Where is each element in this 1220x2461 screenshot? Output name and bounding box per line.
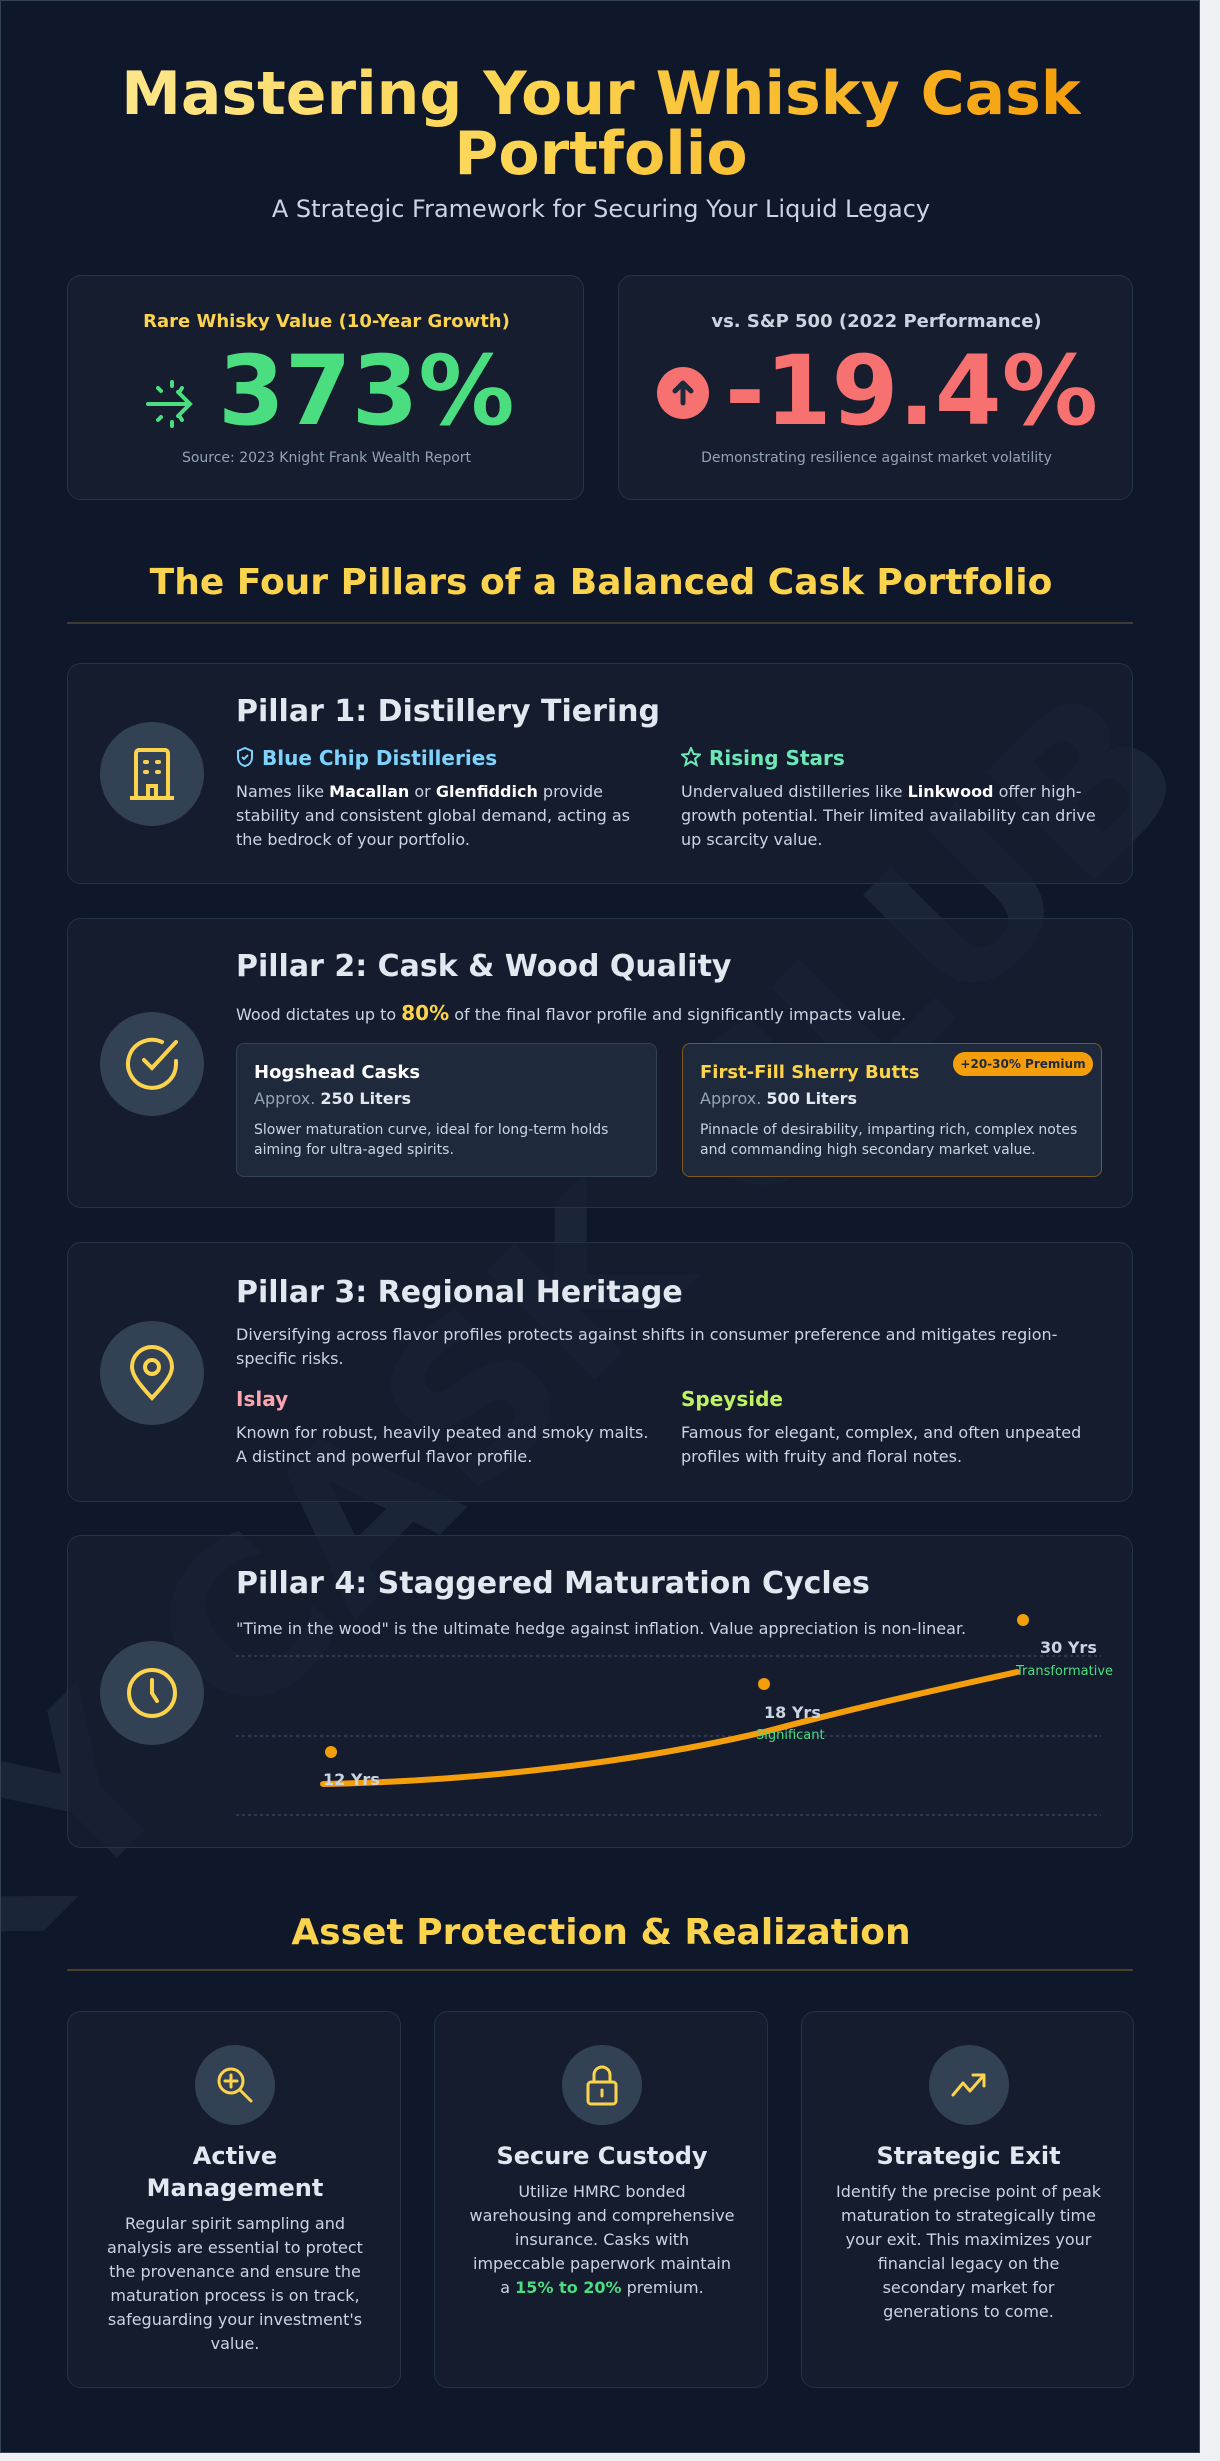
point: 30 yrs: 30 Yrs [1040, 1638, 1097, 1657]
point: 18 yrs: Significant [756, 1728, 825, 1743]
card: secure custody: Secure Custody [496, 2142, 708, 2170]
column: rising stars: Rising Stars [709, 746, 845, 770]
point: 12 yrs [323, 1746, 380, 1789]
panel: pillar 3 [67, 1242, 1133, 1502]
card: strategic exit [801, 2011, 1134, 2388]
label: Rare Whisky Value (10-Year Growth) [143, 311, 510, 332]
icon: lock [562, 2045, 642, 2125]
column: blue chip: Blue Chip Distilleries [262, 746, 497, 770]
badge [953, 1052, 1093, 1076]
icon: clock [100, 1641, 204, 1745]
intro: Diversifying across flavor profiles protects against shifts in consumer preference and mitigates region-specific risks. [236, 1325, 1057, 1368]
subcard: sherry butts: Approx. 500 Liters [700, 1089, 857, 1108]
source: Source: 2023 Knight Frank Wealth Report [182, 450, 471, 466]
card: secure custody [434, 2011, 768, 2388]
column: rising stars: Undervalued distilleries like Linkwood offer high-growth potential. Their limited availability can drive up scarcity value. [681, 782, 1096, 849]
point: 30 yrs [1015, 1614, 1113, 1679]
icon: red up arrow circle [657, 367, 709, 419]
subcard: hogshead: Slower maturation curve, ideal for long-term holds aiming for ultra-aged spirits. [254, 1122, 608, 1158]
icon: trend up [929, 2045, 1009, 2125]
subcard: sherry butts: First-Fill Sherry Butts [700, 1062, 919, 1083]
subcard: hogshead: Approx. 250 Liters [254, 1089, 411, 1108]
column: islay: Islay [236, 1387, 288, 1411]
panel: pillar 2 [67, 918, 1133, 1208]
subcard: hogshead: Hogshead Casks [254, 1062, 420, 1083]
heading: Pillar 3: Regional Heritage [236, 1275, 683, 1310]
subcard: hogshead [236, 1043, 657, 1177]
card: active management: Active [193, 2142, 277, 2170]
icon: map pin [100, 1321, 204, 1425]
section heading: asset protection: Asset Protection & Realization [291, 1912, 911, 1953]
big number: -19.4% [725, 335, 1098, 447]
badge: +20-30% Premium [960, 1057, 1086, 1071]
card: secure custody: Utilize HMRC bonded warehousing and comprehensive insurance. Casks with impeccable paperwork maintain a 15% to 20% premium. [470, 2182, 734, 2297]
section heading: four pillars: The Four Pillars of a Balanced Cask Portfolio [150, 562, 1052, 603]
caption: Demonstrating resilience against market volatility [701, 450, 1052, 466]
column: blue chip [236, 746, 630, 849]
subtitle: A Strategic Framework for Securing Your Liquid Legacy [272, 195, 930, 223]
label: vs. S&P 500 (2022 Performance) [711, 311, 1042, 332]
column: speyside: Famous for elegant, complex, and often unpeated profiles with fruity and floral notes. [681, 1423, 1081, 1466]
icon: growth arrow [146, 380, 193, 428]
heading: Pillar 2: Cask & Wood Quality [236, 949, 731, 984]
column: speyside: Speyside [681, 1387, 783, 1411]
card: active management: Regular spirit sampling and analysis are essential to protect the provenance and ensure the maturation process is on track, safeguarding your investment's value. [107, 2214, 363, 2353]
panel: pillar 1 [67, 663, 1133, 884]
stat card: rare whisky [67, 275, 584, 500]
icon: magnifier [195, 2045, 275, 2125]
card: strategic exit: Identify the precise point of peak maturation to strategically time your exit. This maximizes your financial legacy on the secondary market for generations to come. [836, 2182, 1101, 2321]
title [121, 59, 1081, 189]
panel: pillar 4 [67, 1535, 1133, 1848]
intro: "Time in the wood" is the ultimate hedge against inflation. Value appreciation is non-linear. [236, 1619, 966, 1638]
subcard: sherry butts [682, 1043, 1102, 1177]
big number: 373% [218, 335, 515, 447]
card: active management [67, 2011, 401, 2388]
stat card: S&P [618, 275, 1133, 500]
title: Mastering Your Whisky Cask [121, 59, 1081, 129]
point: 18 yrs: 18 Yrs [764, 1703, 821, 1722]
chart: maturation curve [236, 1614, 1113, 1816]
column: islay: Known for robust, heavily peated and smoky malts. A distinct and powerful flavor profile. [236, 1423, 648, 1466]
column: islay [236, 1387, 648, 1466]
intro: Wood dictates up to 80% of the final flavor profile and significantly impacts value. [236, 1001, 906, 1025]
point: 30 yrs: Transformative [1015, 1664, 1113, 1679]
icon: building [100, 722, 204, 826]
title: Portfolio [454, 119, 748, 189]
column: speyside [681, 1387, 1081, 1466]
point: 12 yrs: 12 Yrs [323, 1770, 380, 1789]
subcard: sherry butts: Pinnacle of desirability, imparting rich, complex notes and commanding high secondary market value. [700, 1122, 1077, 1158]
card: strategic exit: Strategic Exit [876, 2142, 1061, 2170]
heading: Pillar 1: Distillery Tiering [236, 694, 660, 729]
column: rising stars [681, 746, 1096, 849]
icon: check circle [100, 1012, 204, 1116]
point: 18 yrs [756, 1678, 825, 1743]
card: active management: Management [147, 2174, 323, 2202]
heading: Pillar 4: Staggered Maturation Cycles [236, 1566, 870, 1601]
column: blue chip: Names like Macallan or Glenfiddich provide stability and consistent global demand, acting as the bedrock of your portfolio. [236, 782, 630, 849]
